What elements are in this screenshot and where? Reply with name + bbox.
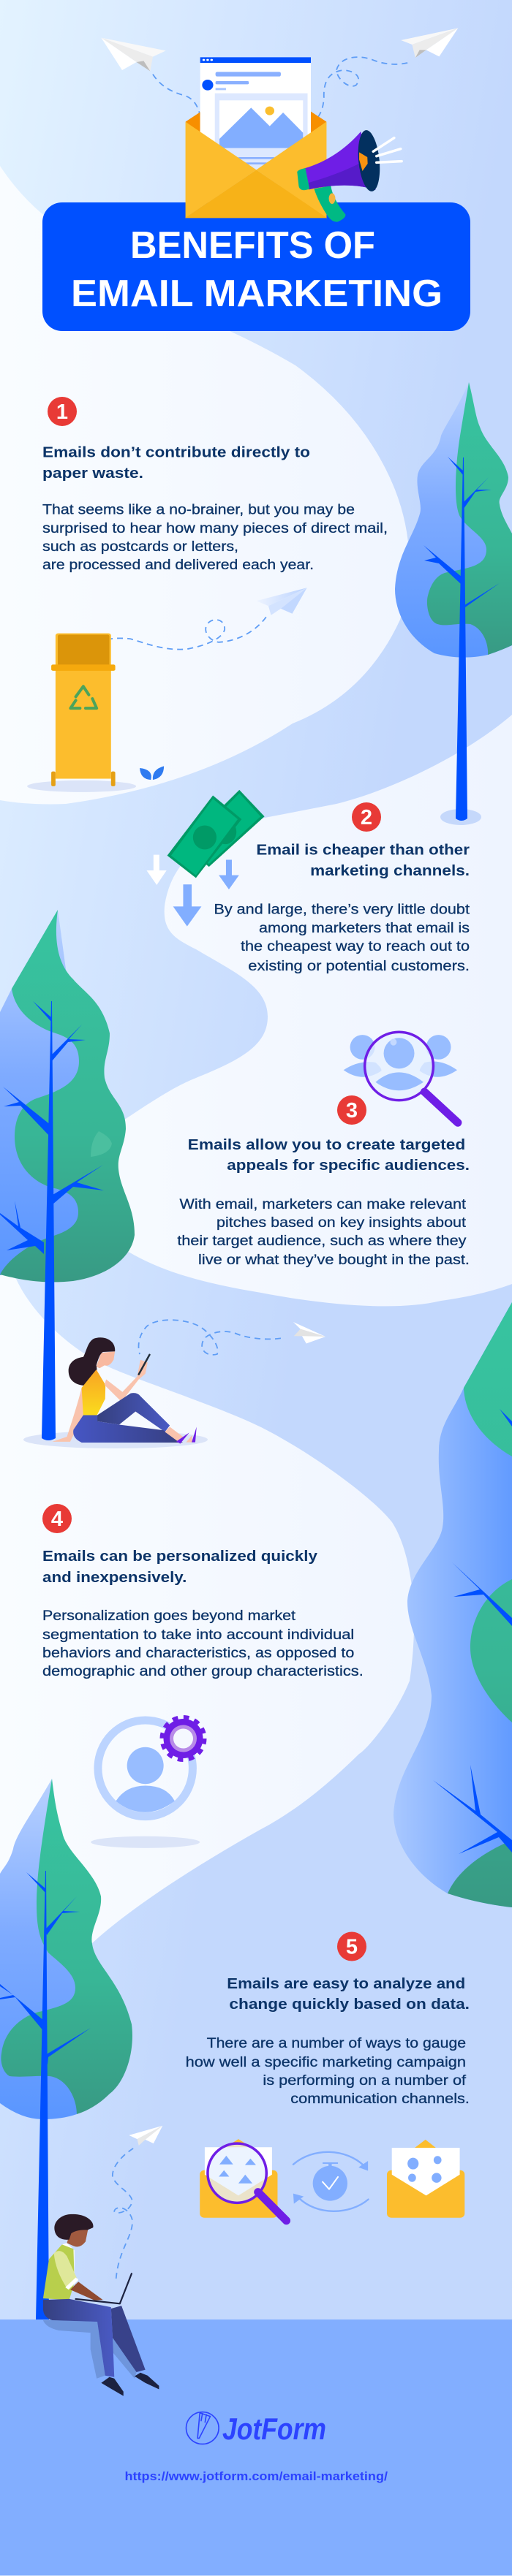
dashed flight path xyxy=(113,2148,133,2281)
section 1 illustration: recycling bin and plane xyxy=(27,588,307,792)
megaphone xyxy=(297,129,402,222)
footer URL: https://www.jotform.com/email-marketing/ xyxy=(124,2469,388,2483)
title banner xyxy=(42,202,470,331)
money bills xyxy=(167,790,265,878)
title text xyxy=(71,224,443,315)
tree: bottom left xyxy=(0,1779,132,2319)
timer with cycle arrows xyxy=(293,2152,369,2211)
dashed flight path xyxy=(83,617,266,662)
section 4 heading: and inexpensively. xyxy=(42,1569,187,1586)
section 4 number xyxy=(42,1504,72,1533)
section 2 body: the cheapest way to reach out to xyxy=(241,938,470,954)
envelope and megaphone illustration xyxy=(185,57,402,222)
tree: top right xyxy=(395,382,512,825)
section 5 heading xyxy=(227,1975,470,2013)
dashed flight path xyxy=(139,1320,281,1355)
section 5 heading: change quickly based on data. xyxy=(229,1996,470,2013)
section 1 heading xyxy=(42,444,310,482)
section 4 body: Personalization goes beyond market xyxy=(42,1608,296,1624)
section 5 body: how well a specific marketing campaign xyxy=(186,2054,466,2070)
envelope with dots xyxy=(387,2140,464,2218)
section 4 body: behaviors and characteristics, as opposed to xyxy=(42,1645,354,1661)
section 2 number: 2 xyxy=(361,806,372,829)
tree: middle left xyxy=(0,910,208,1448)
arrow: small blue xyxy=(219,860,239,889)
section 3 illustration: audience under magnifier xyxy=(344,1032,458,1122)
section 3 number: 3 xyxy=(346,1099,358,1122)
seated woman xyxy=(52,1337,197,1444)
paper plane: top left xyxy=(101,38,166,71)
section 3 body xyxy=(177,1196,470,1268)
header illustration xyxy=(101,28,458,126)
section 2 body: among marketers that email is xyxy=(259,920,470,936)
section 3 body: their target audience, such as where they xyxy=(177,1233,467,1249)
envelope front xyxy=(185,122,327,218)
paper plane xyxy=(129,2126,162,2146)
arrow: large blue xyxy=(173,884,201,927)
title text: BENEFITS OF xyxy=(130,224,375,267)
section 5 heading: Emails are easy to analyze and xyxy=(227,1975,465,1992)
paper plane xyxy=(293,1322,325,1344)
section 2 illustration xyxy=(146,790,265,927)
section 4 heading: Emails can be personalized quickly xyxy=(42,1548,318,1565)
section 4 number: 4 xyxy=(51,1508,63,1531)
dashed flight path left xyxy=(153,75,200,115)
section 3 heading: Emails allow you to create targeted xyxy=(188,1136,465,1153)
man with laptop xyxy=(43,2214,159,2396)
section 1 number: 1 xyxy=(56,400,68,424)
section 4 illustration: user profile with gear xyxy=(91,1717,205,1848)
section 5 body: There are a number of ways to gauge xyxy=(207,2035,466,2051)
JotForm logo wordmark: JotForm xyxy=(222,2412,326,2446)
section 4 heading xyxy=(42,1548,318,1586)
section 1 body: surprised to hear how many pieces of direct mail, xyxy=(42,520,388,536)
paper plane xyxy=(256,588,307,615)
dashed flight path right xyxy=(309,57,407,126)
section 3 body: With email, marketers can make relevant xyxy=(180,1196,467,1212)
section 2 heading: Email is cheaper than other xyxy=(256,842,470,859)
section 3 number xyxy=(337,1095,366,1125)
footer band xyxy=(0,2319,512,2575)
section 5 body xyxy=(186,2035,470,2107)
email document xyxy=(200,57,311,170)
section 5 body: is performing on a number of xyxy=(263,2072,467,2089)
section 4 body xyxy=(42,1608,364,1679)
profile ring and avatar xyxy=(91,1720,200,1848)
JotForm logo mark xyxy=(186,2412,219,2444)
section 1 body: That seems like a no-brainer, but you may be xyxy=(42,502,355,518)
section 2 body xyxy=(214,902,470,974)
section 3 heading xyxy=(188,1136,470,1174)
section 5 body: communication channels. xyxy=(290,2091,470,2107)
title text: EMAIL MARKETING xyxy=(71,273,443,315)
section 2 body: By and large, there’s very little doubt xyxy=(214,902,470,918)
background wave: middle light area xyxy=(73,715,512,1306)
section 3 body: pitches based on key insights about xyxy=(217,1215,467,1231)
girl with phone illustration xyxy=(52,1320,325,1444)
section 1 heading: Emails don’t contribute directly to xyxy=(42,444,310,460)
section 2 heading xyxy=(256,842,470,879)
section 3 heading: appeals for specific audiences. xyxy=(227,1157,470,1174)
section 2 number xyxy=(352,802,381,832)
section 5 illustration and seated man xyxy=(43,2126,464,2444)
section 1 body: such as postcards or letters, xyxy=(42,539,238,555)
section 4 body: demographic and other group characteristics. xyxy=(42,1663,364,1679)
section 5 number: 5 xyxy=(346,1935,358,1958)
section 1 body: are processed and delivered each year. xyxy=(42,557,314,573)
section 5 number xyxy=(337,1932,366,1961)
section 1 heading: paper waste. xyxy=(42,465,143,482)
section 3 body: live or what they’ve bought in the past. xyxy=(198,1252,470,1268)
recycling bin xyxy=(27,634,136,792)
section 2 body: existing or potential customers. xyxy=(248,958,470,974)
background wave: top light area xyxy=(0,166,409,804)
section 1 body xyxy=(42,502,388,573)
paper plane: top right xyxy=(401,28,458,58)
background wave: lower light area xyxy=(0,1272,414,2039)
plant sprout xyxy=(140,766,164,780)
section 1 number xyxy=(48,397,77,426)
section 4 body: segmentation to take into account individual xyxy=(42,1627,354,1643)
arrow: white xyxy=(146,855,167,885)
tree: right side xyxy=(394,1302,512,1907)
gear xyxy=(162,1717,205,1760)
envelope with magnifier xyxy=(200,2139,287,2221)
section 2 heading: marketing channels. xyxy=(310,862,470,879)
envelope back flaps xyxy=(186,112,326,133)
